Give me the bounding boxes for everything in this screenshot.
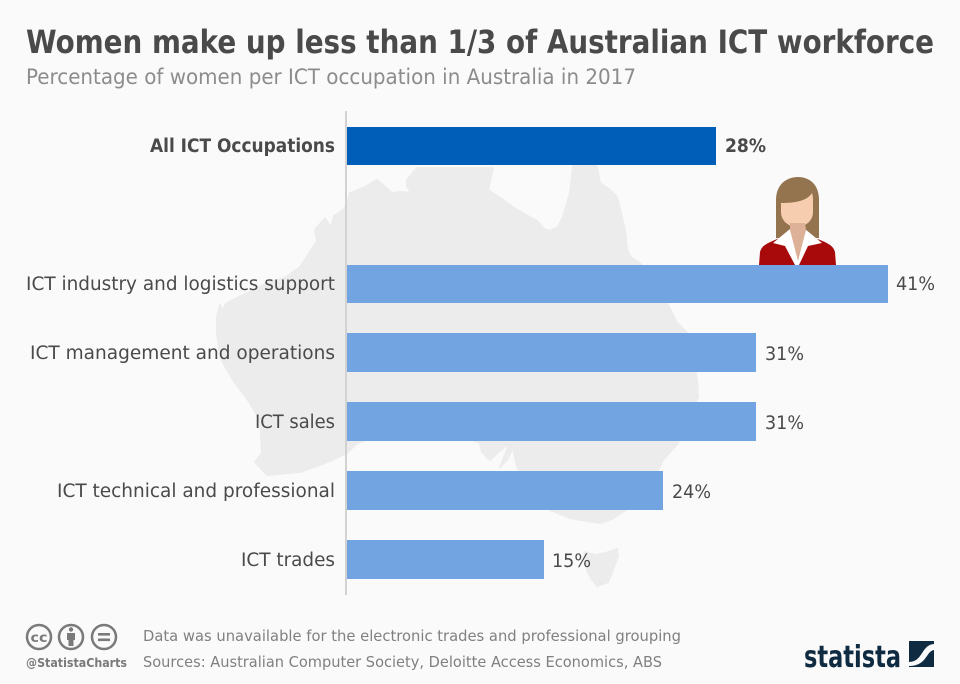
- row: All ICT Occupations: 28%: [725, 136, 766, 157]
- row: ICT trades: 15%: [552, 551, 591, 572]
- row: ICT management and operations: 31%: [765, 344, 804, 365]
- row: ICT industry and logistics support: [26, 265, 935, 303]
- icon: Creative Commons licence badges: cc: [30, 631, 48, 646]
- row: ICT sales: ICT sales: [255, 412, 335, 433]
- row: ICT management and operations: [30, 333, 804, 372]
- row: ICT industry and logistics support: 41%: [896, 274, 935, 295]
- sources: Sources: Australian Computer Society, Deloitte Access Economics, ABS: [143, 653, 662, 671]
- subtitle: Percentage of women per ICT occupation in Australia in 2017: [26, 65, 636, 89]
- icon: Creative Commons licence badges: [27, 625, 116, 649]
- row: ICT trades: ICT trades: [241, 550, 335, 571]
- background map: Australia: [217, 148, 698, 586]
- row: ICT sales: 31%: [765, 413, 804, 434]
- row: ICT technical and professional: 24%: [672, 482, 711, 503]
- row: ICT industry and logistics support: ICT industry and logistics support: [26, 274, 335, 295]
- row: ICT management and operations: ICT management and operations: [30, 343, 335, 364]
- icon: woman in red jacket: [759, 177, 836, 265]
- row: ICT trades: [241, 540, 591, 579]
- logo: statista: statista: [804, 640, 901, 675]
- social handle: @StatistaCharts: [26, 656, 127, 670]
- axis line: [345, 111, 347, 595]
- row: ICT technical and professional: ICT technical and professional: [57, 481, 335, 502]
- row: ICT technical and professional: [57, 471, 711, 510]
- row: All ICT Occupations: [150, 127, 766, 165]
- footnote: Data was unavailable for the electronic trades and professional grouping: [143, 627, 681, 645]
- row: ICT sales: [255, 402, 804, 441]
- row: All ICT Occupations: All ICT Occupations: [150, 136, 335, 157]
